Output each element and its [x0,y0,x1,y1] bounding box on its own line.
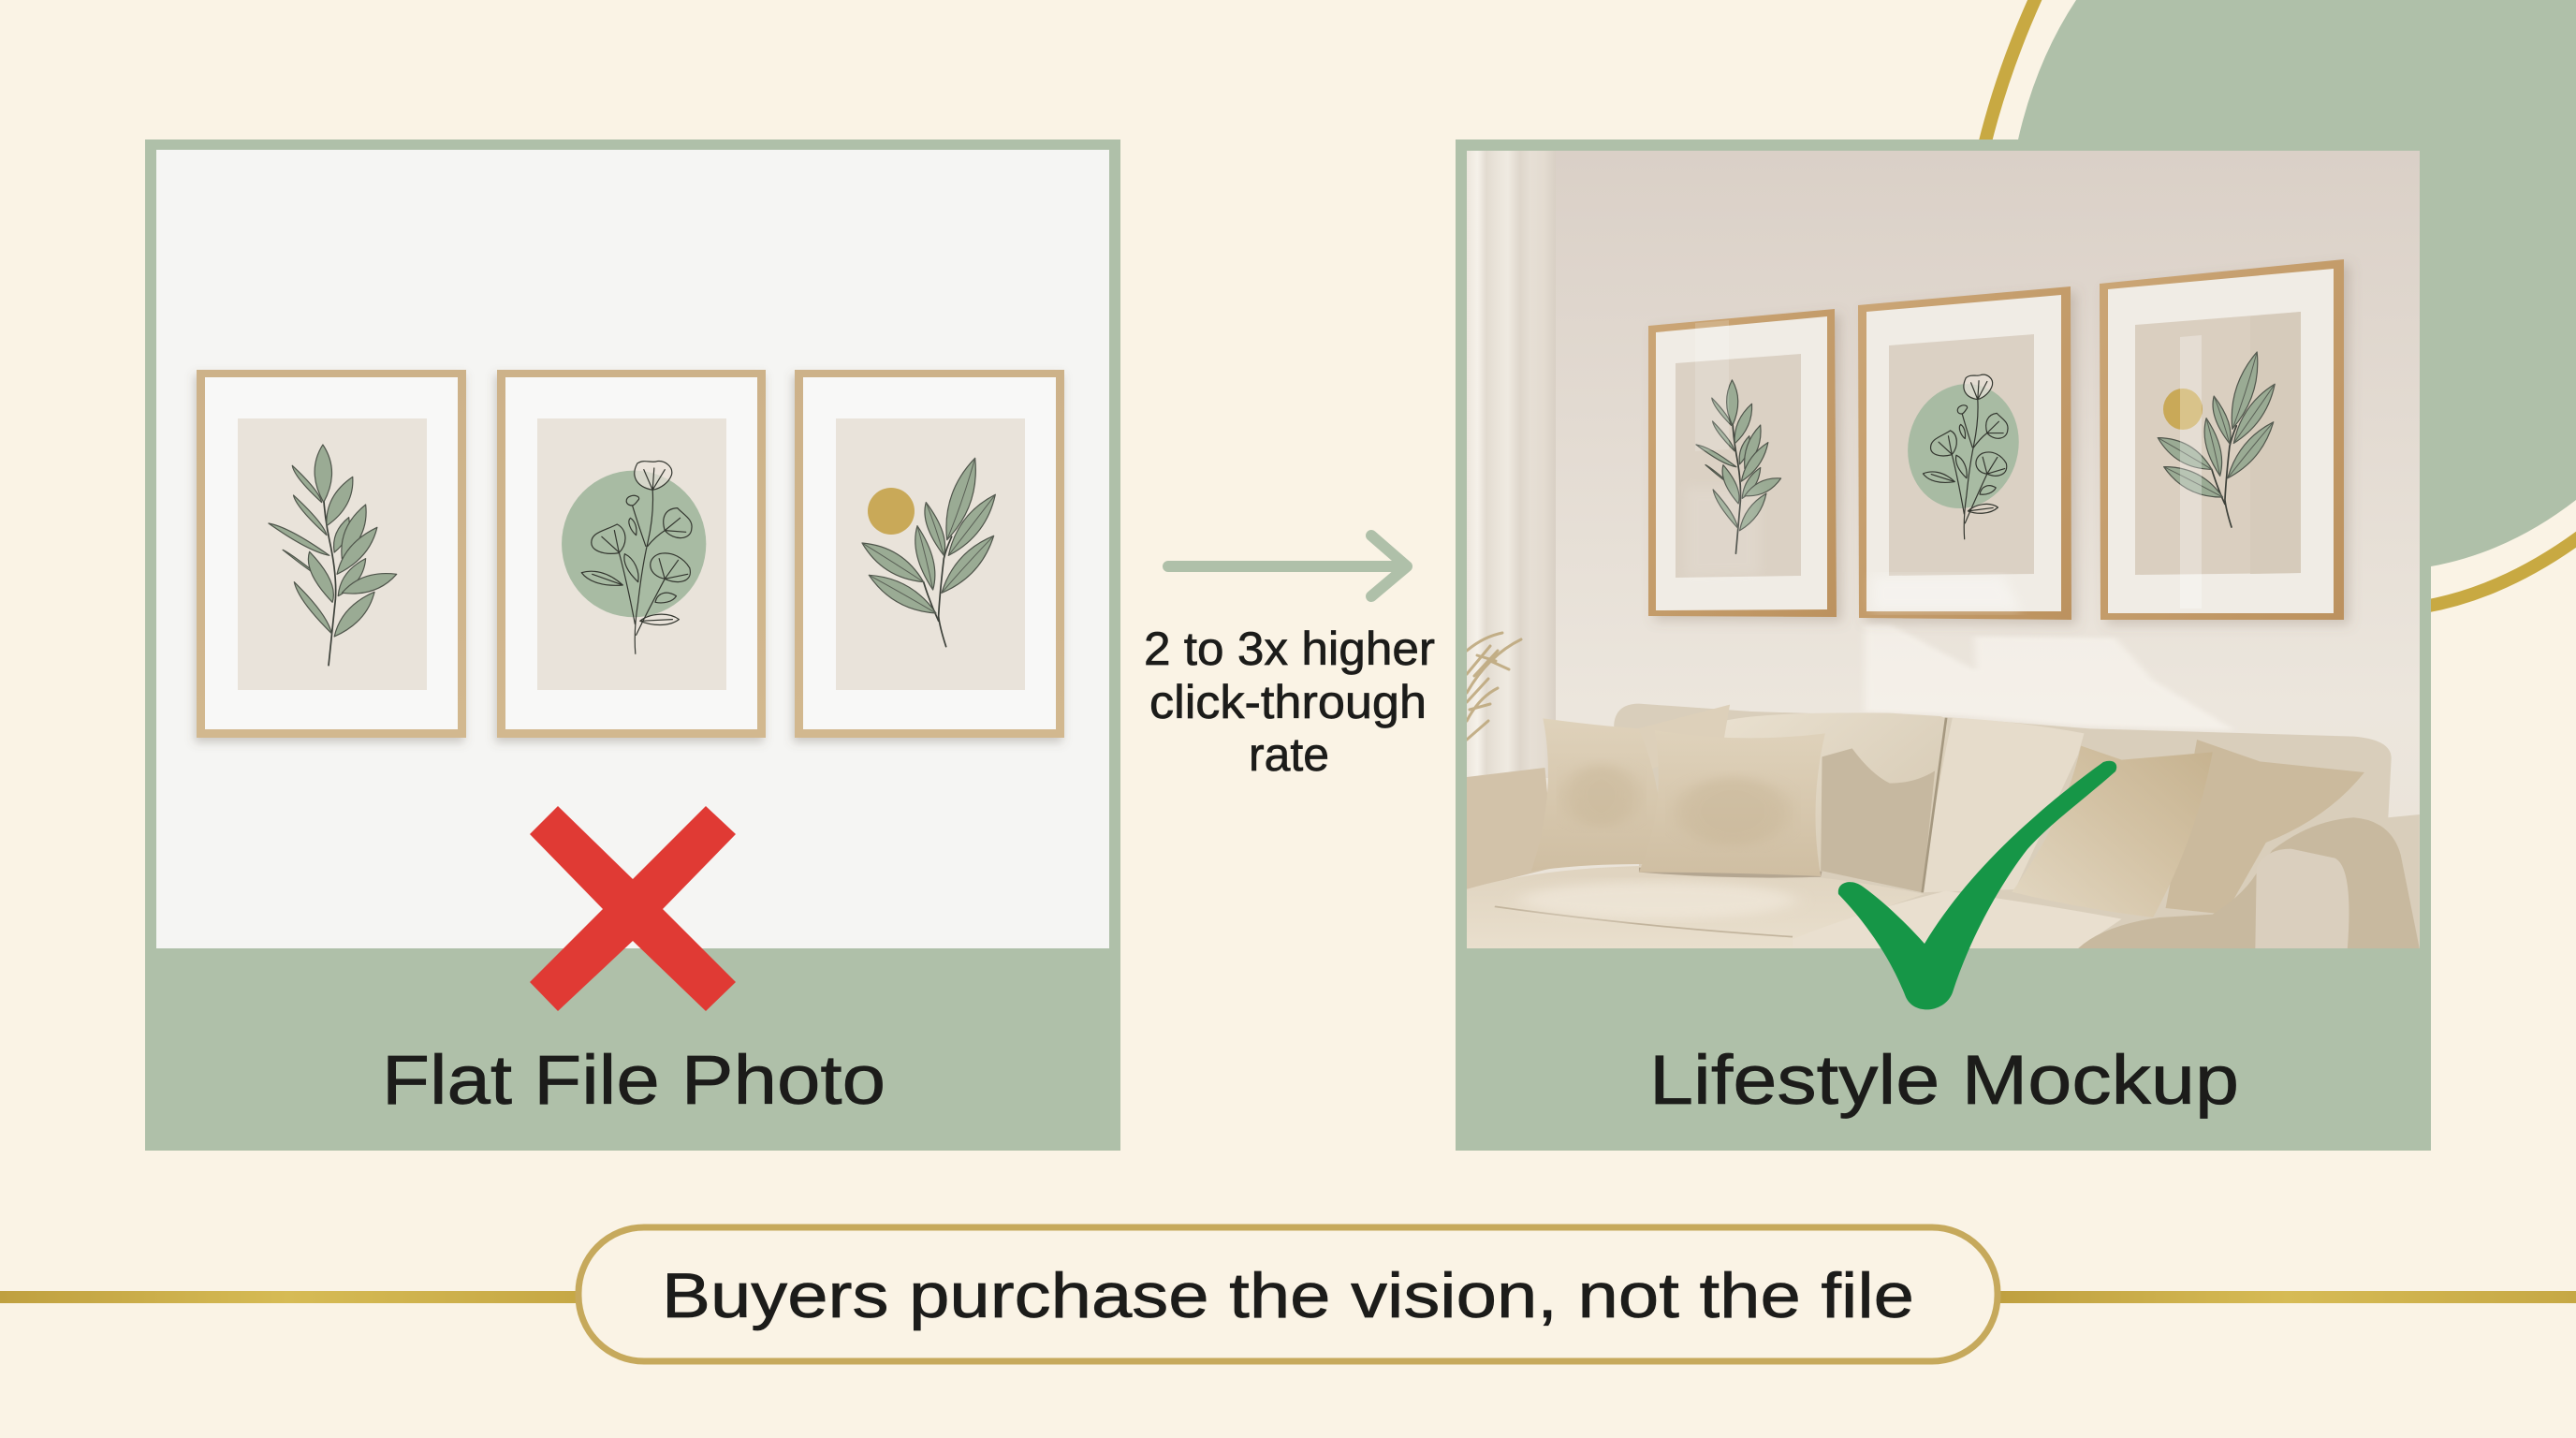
gold divider right [1999,1291,2576,1303]
framed print: leaves with gold sun [795,370,1064,738]
label: flat file photo: Flat File Photo [382,1041,886,1119]
seat cushions [1467,866,1925,948]
gold divider left [0,1291,577,1303]
left pillows [1638,705,1730,774]
right arm [2255,849,2349,948]
back cushions [1724,712,1948,892]
throw blanket [2078,817,2420,948]
icon: red cross [530,806,736,1011]
callout: click-through rate: rate [1249,728,1329,781]
icon: green check mark [1838,761,2116,1009]
lifestyle room photo [1467,151,2420,948]
label: lifestyle mockup: Lifestyle Mockup [1649,1041,2239,1119]
sofa backrest [1614,704,2420,948]
left arm [1467,768,1555,889]
callout: click-through rate [1144,623,1435,781]
wall frame 2 [1858,286,2071,620]
arrow [1168,536,1407,596]
decorative sage circle top right [2018,0,2576,566]
callout: click-through rate: click-through [1149,676,1427,728]
right pillows [2166,740,2364,915]
takeaway pill [578,1227,1998,1361]
sofa with pillows and throw [1467,704,2420,948]
callout: click-through rate: 2 to 3x higher [1144,623,1435,675]
curtain [1467,151,1556,778]
wall [1467,151,2420,948]
flat photo background [156,150,1109,948]
sunlight patch on wall [1865,624,2234,730]
framed print: flowers on sage circle [497,370,766,738]
wall frame 1 [1648,309,1837,617]
dried grass [1467,633,1521,740]
framed print: leaf sprig [197,370,466,738]
wall frame 3 [2100,259,2344,620]
panel: lifestyle mockup [1456,139,2431,1151]
panel: flat file photo [145,139,1120,1151]
wall art: three frames [1648,259,2344,620]
takeaway text: Buyers purchase the vision, not the file [662,1260,1914,1331]
decorative gold ring top right [1984,0,2576,607]
